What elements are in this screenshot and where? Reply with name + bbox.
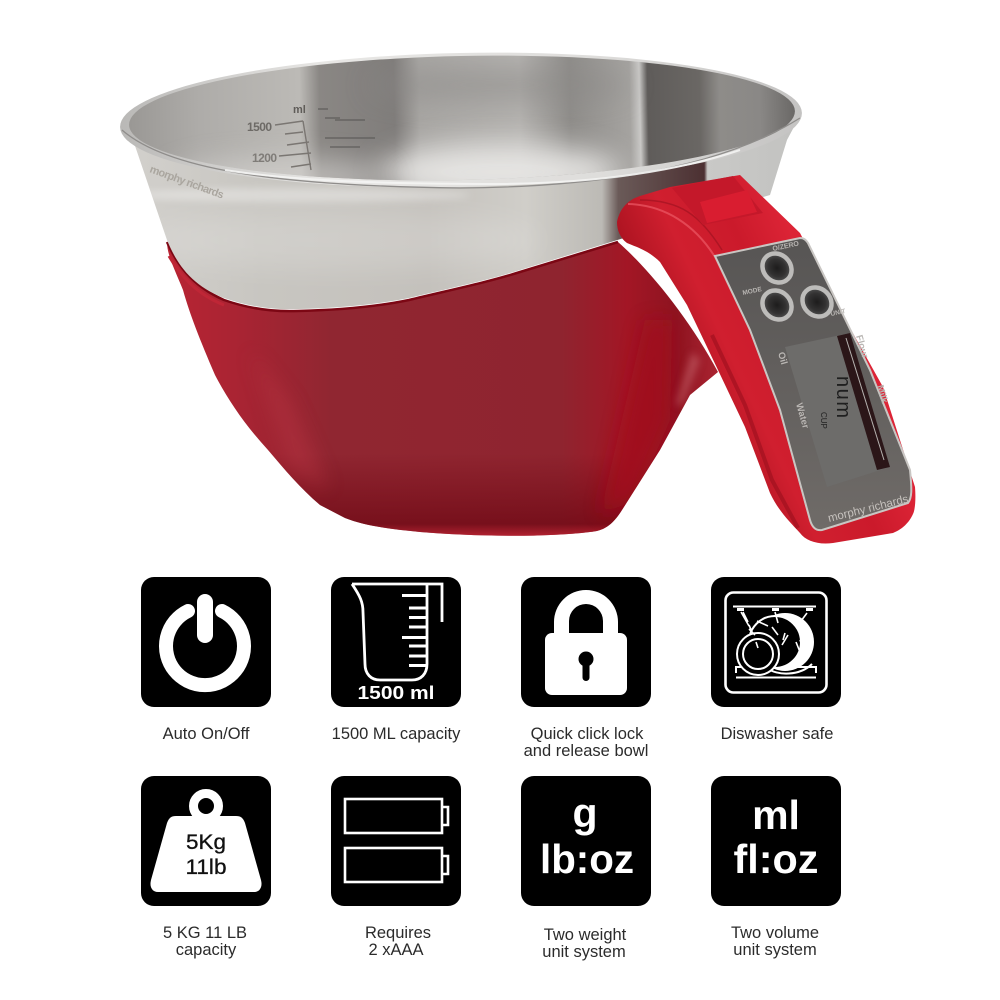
label: lock and release (524, 725, 648, 760)
lock slider (672, 176, 763, 225)
panel labels: Water (793, 402, 811, 430)
label: weight units: Two weight (544, 926, 627, 944)
panel labels: MODE (742, 286, 763, 297)
icon: weight (141, 776, 271, 906)
icon: beaker 1500 ml (331, 577, 461, 707)
icon: auto on/off (141, 577, 271, 707)
measuring scale markings (247, 104, 375, 170)
buttons (756, 247, 838, 326)
panel labels: morphy richards (827, 493, 910, 525)
panel labels: Flour (853, 334, 870, 360)
icon: weight units: g (572, 790, 598, 836)
icon: padlock (521, 577, 651, 707)
label: weight units (542, 926, 627, 961)
measuring scale markings: 1500 (247, 120, 272, 134)
label: volume units: unit system (733, 941, 817, 959)
LCD screen (785, 333, 890, 487)
label: batteries: Requires (365, 924, 431, 942)
label: batteries (365, 924, 431, 959)
measuring scale markings: ml (293, 104, 306, 116)
panel labels: Milk (874, 384, 890, 405)
icon: volume units: ml (752, 792, 800, 838)
measuring scale markings: 1200 (252, 151, 277, 165)
label: weight capacity: 5 KG 11 LB (163, 924, 247, 942)
label: volume units (731, 924, 819, 959)
icon: volume units (711, 776, 841, 906)
panel labels: UNIT (830, 308, 846, 318)
red scale base (167, 242, 718, 536)
engraved brand on bowl: morphy richards (148, 164, 225, 201)
label: capacity: 1500 ML capacity (332, 725, 461, 743)
label: weight capacity (163, 924, 247, 959)
panel labels: O/ZERO (772, 240, 800, 253)
product photo: measuring bowl scale (119, 46, 915, 544)
red display handle (617, 175, 915, 544)
icon: weight: 5Kg (186, 831, 226, 854)
LCD screen: CUP (819, 412, 828, 429)
LCD screen: num (832, 376, 854, 418)
bowl interior and rim (120, 52, 802, 189)
panel labels: Oil (775, 351, 789, 366)
icon: batteries (331, 776, 461, 906)
label: lock and release: and release bowl (524, 742, 648, 760)
icon: weight units (521, 776, 651, 906)
label: weight capacity: capacity (176, 941, 237, 959)
icon: beaker 1500 ml: 1500 ml (358, 682, 434, 703)
panel labels (742, 240, 910, 525)
icon: volume units: fl:oz (734, 836, 818, 882)
stainless bowl exterior (130, 125, 795, 309)
label: lock and release: Quick click lock (531, 725, 644, 743)
label: volume units: Two volume (731, 924, 819, 942)
label: auto on/off: Auto On/Off (163, 725, 250, 743)
icon: weight units: lb:oz (540, 836, 634, 882)
icon: weight: 11lb (186, 856, 226, 879)
icon: dishwasher (711, 577, 841, 707)
label: weight units: unit system (542, 943, 626, 961)
label: batteries: 2 xAAA (368, 941, 424, 959)
control panel (715, 238, 911, 530)
label: dishwasher safe: Diswasher safe (721, 725, 833, 743)
